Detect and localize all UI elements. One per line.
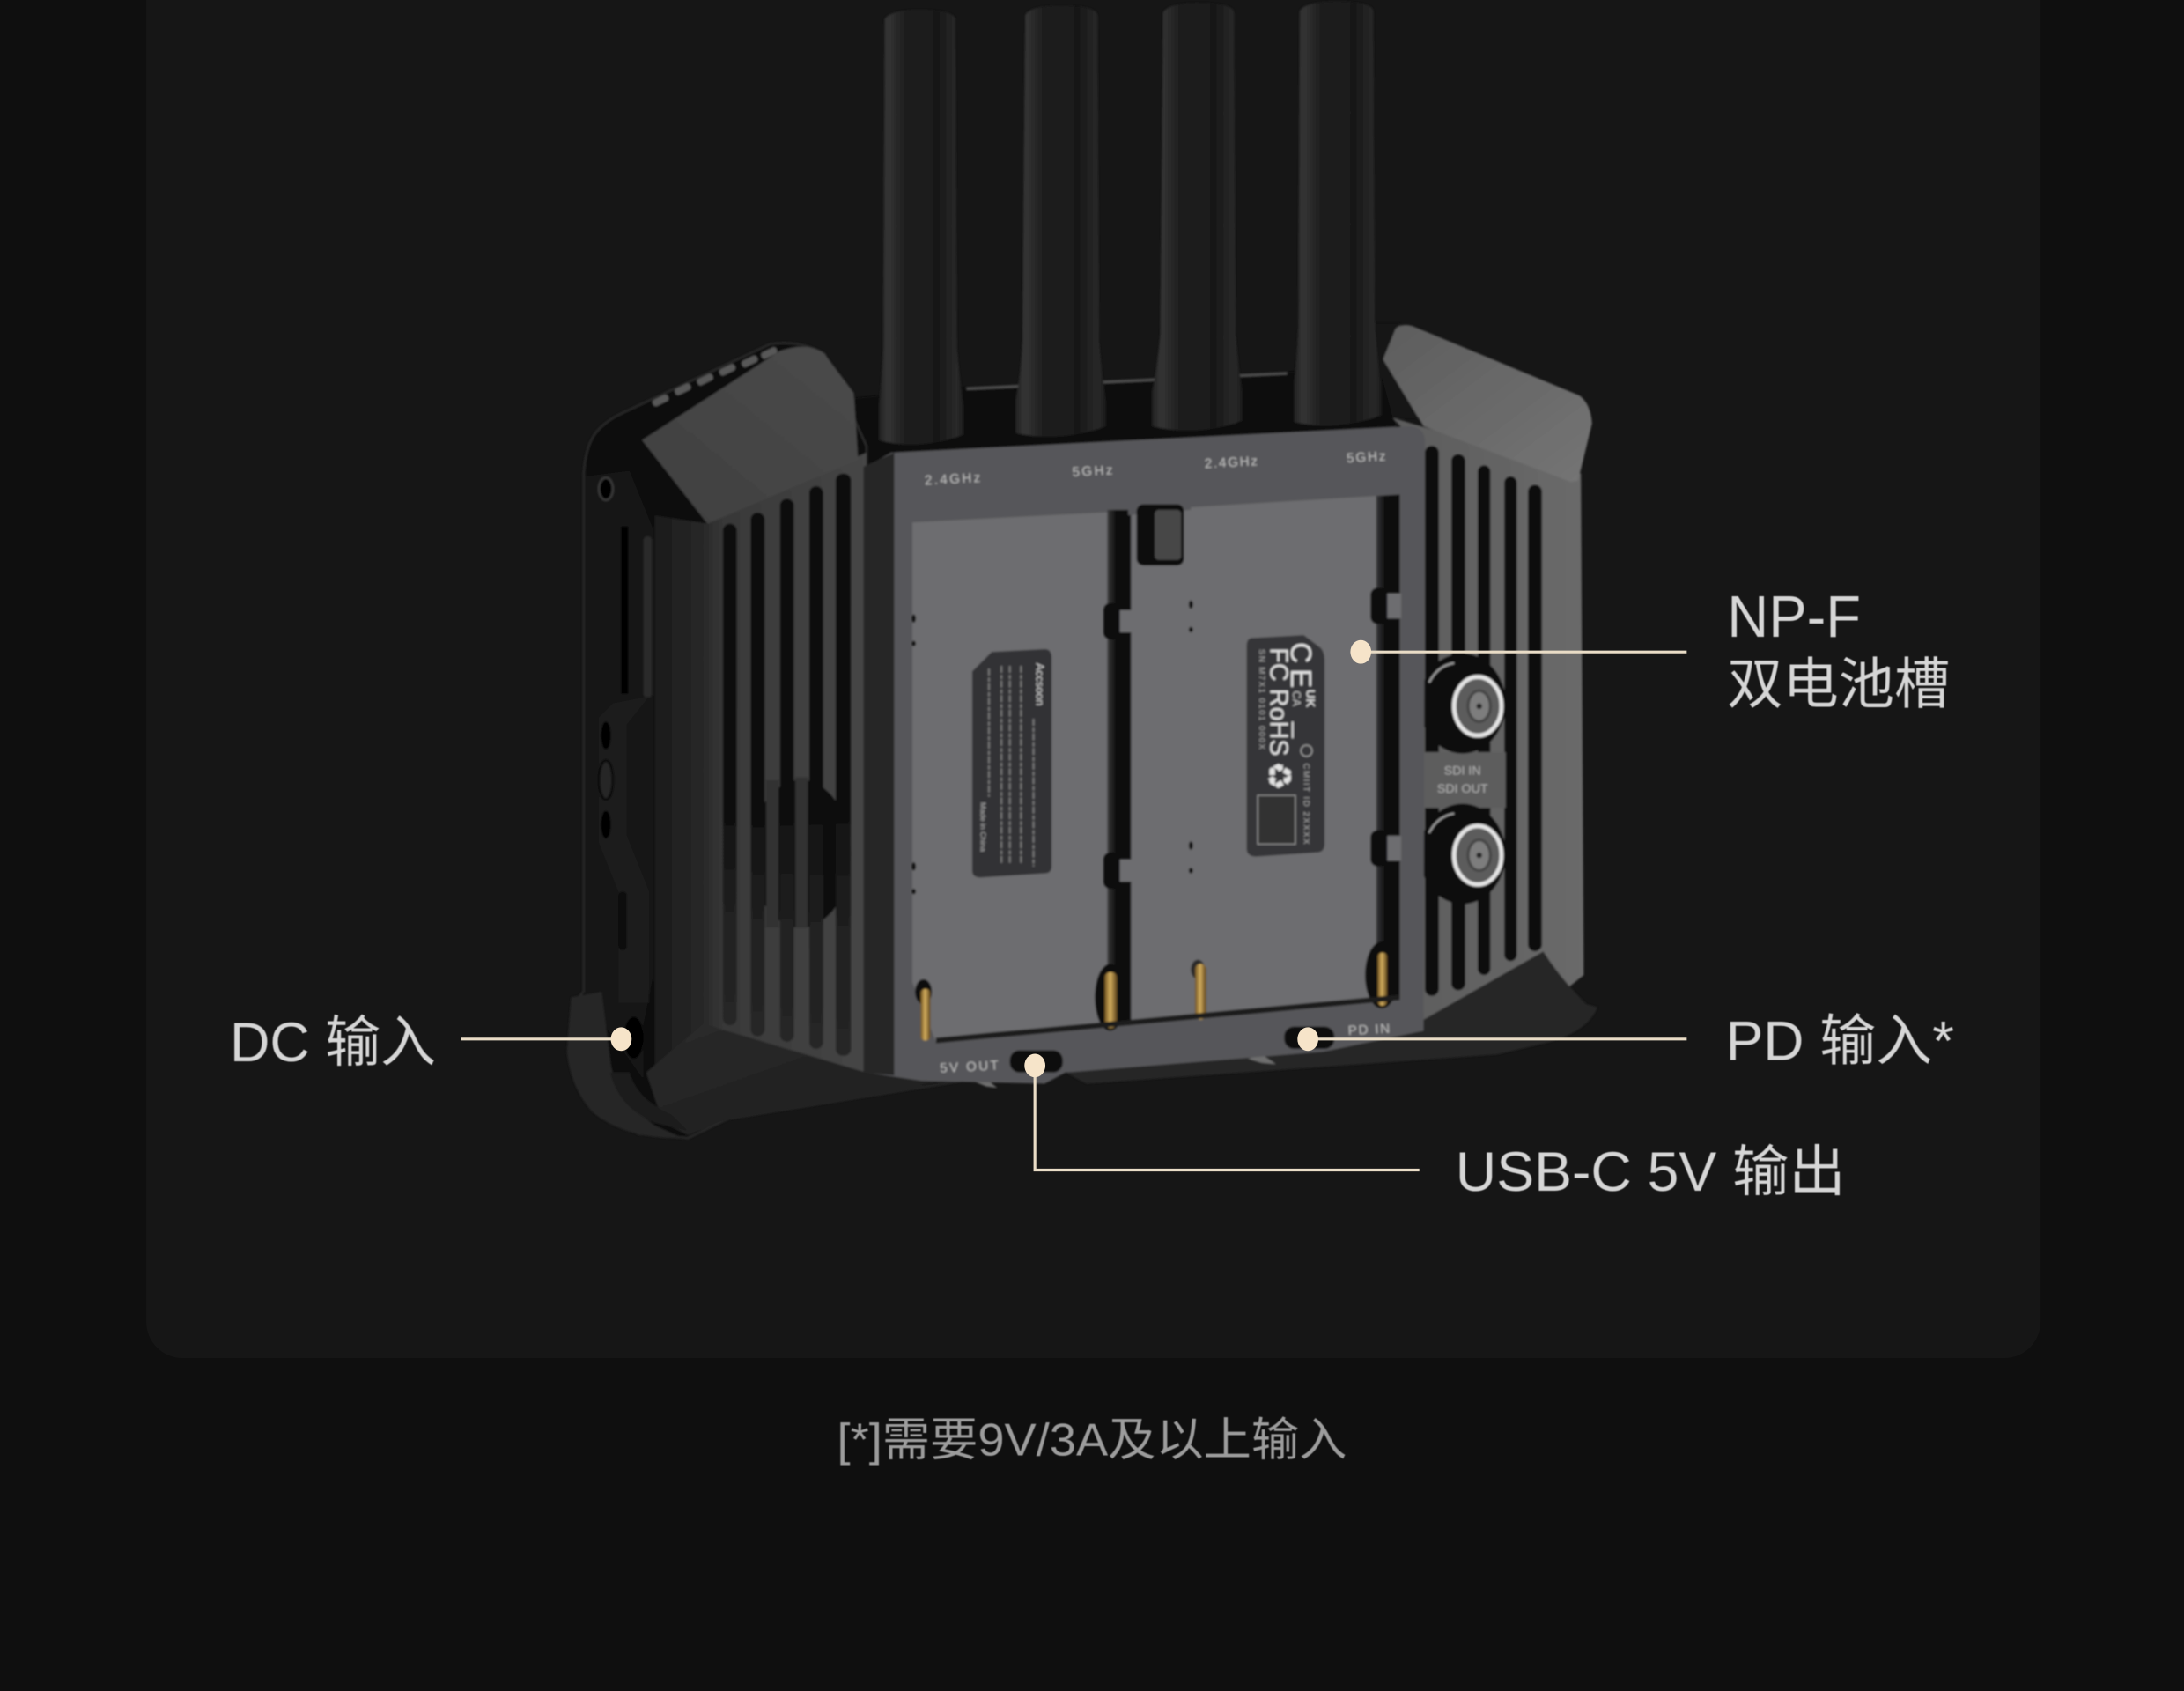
top centre tab (1128, 498, 1191, 515)
label text: PD 输入* (1726, 1011, 1954, 1073)
label text (1727, 585, 1950, 716)
right certification label (1247, 635, 1324, 857)
bottom right wedge (1066, 951, 1597, 1083)
marker dot (1297, 1027, 1318, 1051)
antenna 1 (879, 10, 963, 445)
right rail strip (1376, 494, 1400, 1001)
rubber bumper (567, 992, 682, 1138)
right certification label: UK (1303, 690, 1317, 708)
SDI labels: SDI OUT (1437, 782, 1488, 796)
centre divider strip (1107, 510, 1131, 1027)
cooling fan shadow (750, 780, 851, 927)
silkscreen labels: PD IN (1347, 1022, 1391, 1038)
label text: DC 输入 (230, 1012, 436, 1074)
right certification label: FC RoHS ♻ (1264, 647, 1292, 788)
footnote: [*]需要9V/3A及以上输入 (837, 1415, 1347, 1466)
marker dot (1024, 1053, 1045, 1077)
battery latch (1137, 505, 1184, 565)
silkscreen labels: 5GHz (1347, 449, 1386, 466)
antenna 3 (1152, 3, 1243, 431)
SDI labels: SDI IN (1444, 764, 1481, 778)
USB-C 5V output port (1010, 1050, 1063, 1073)
elbow leader line (1035, 1066, 1420, 1170)
USB-C PD input port (1284, 1027, 1334, 1049)
antenna 2 (1015, 5, 1106, 437)
callout: PD input (1297, 1011, 1954, 1073)
right certification label: SN M7X1 0101 000X (1257, 649, 1266, 750)
right top cap (1372, 323, 1592, 482)
underside feet highlights (970, 1054, 1276, 1088)
SDI connectors (1420, 654, 1506, 904)
silkscreen labels (925, 449, 1391, 1076)
label text: USB-C 5V 输出 (1456, 1141, 1846, 1203)
right vents (1425, 446, 1542, 996)
device: rear view of monitor (567, 2, 1597, 1138)
silkscreen labels: 5V OUT (940, 1058, 999, 1076)
leader line (461, 1038, 621, 1040)
antenna mount strip (852, 365, 1396, 465)
callout: NP-F dual battery slots (1350, 585, 1950, 716)
fan ribs (766, 778, 808, 927)
DC port hole (624, 1017, 644, 1059)
label text: NP-F (1727, 585, 1861, 650)
label text: 双电池槽 (1727, 654, 1950, 716)
top edge vent slots (652, 346, 778, 407)
back plate (864, 426, 1425, 1083)
right certification label: CE (1284, 642, 1317, 688)
silkscreen labels: 2.4GHz (925, 470, 981, 488)
silkscreen labels: 5GHz (1072, 463, 1113, 480)
panel: product card (146, 0, 2040, 1358)
right certification label: CA (1290, 690, 1302, 707)
left rating label: Accsoon (1034, 663, 1046, 705)
left vents (723, 474, 851, 1056)
battery slots (911, 494, 1401, 1042)
right housing body (1393, 417, 1583, 1037)
right certification label: CMIIT ID 2XXXX (1301, 764, 1310, 845)
mounting marks (911, 601, 1193, 894)
bottom lip (936, 994, 1400, 1044)
left rating label: Made in China (978, 802, 987, 852)
left rating label (972, 649, 1051, 877)
rail notches (1103, 587, 1387, 889)
leader line (1361, 651, 1686, 653)
gold battery contacts (915, 941, 1398, 1040)
antennas (879, 2, 1382, 445)
leader line (1308, 1038, 1686, 1040)
SDI port upper (1420, 654, 1506, 754)
callout: DC input (230, 1012, 631, 1074)
marker dot (1350, 640, 1371, 664)
left top cap (642, 346, 858, 524)
SDI port lower (1420, 804, 1506, 904)
silkscreen labels: 2.4GHz (1204, 454, 1258, 471)
SDI labels (1437, 764, 1488, 796)
callout: USB-C 5V output (1024, 1053, 1846, 1203)
bottom left wedge (646, 1023, 961, 1135)
antenna 4 (1294, 2, 1382, 425)
marker dot (611, 1027, 631, 1051)
left housing body (574, 343, 961, 1138)
left side ports (567, 471, 688, 1138)
